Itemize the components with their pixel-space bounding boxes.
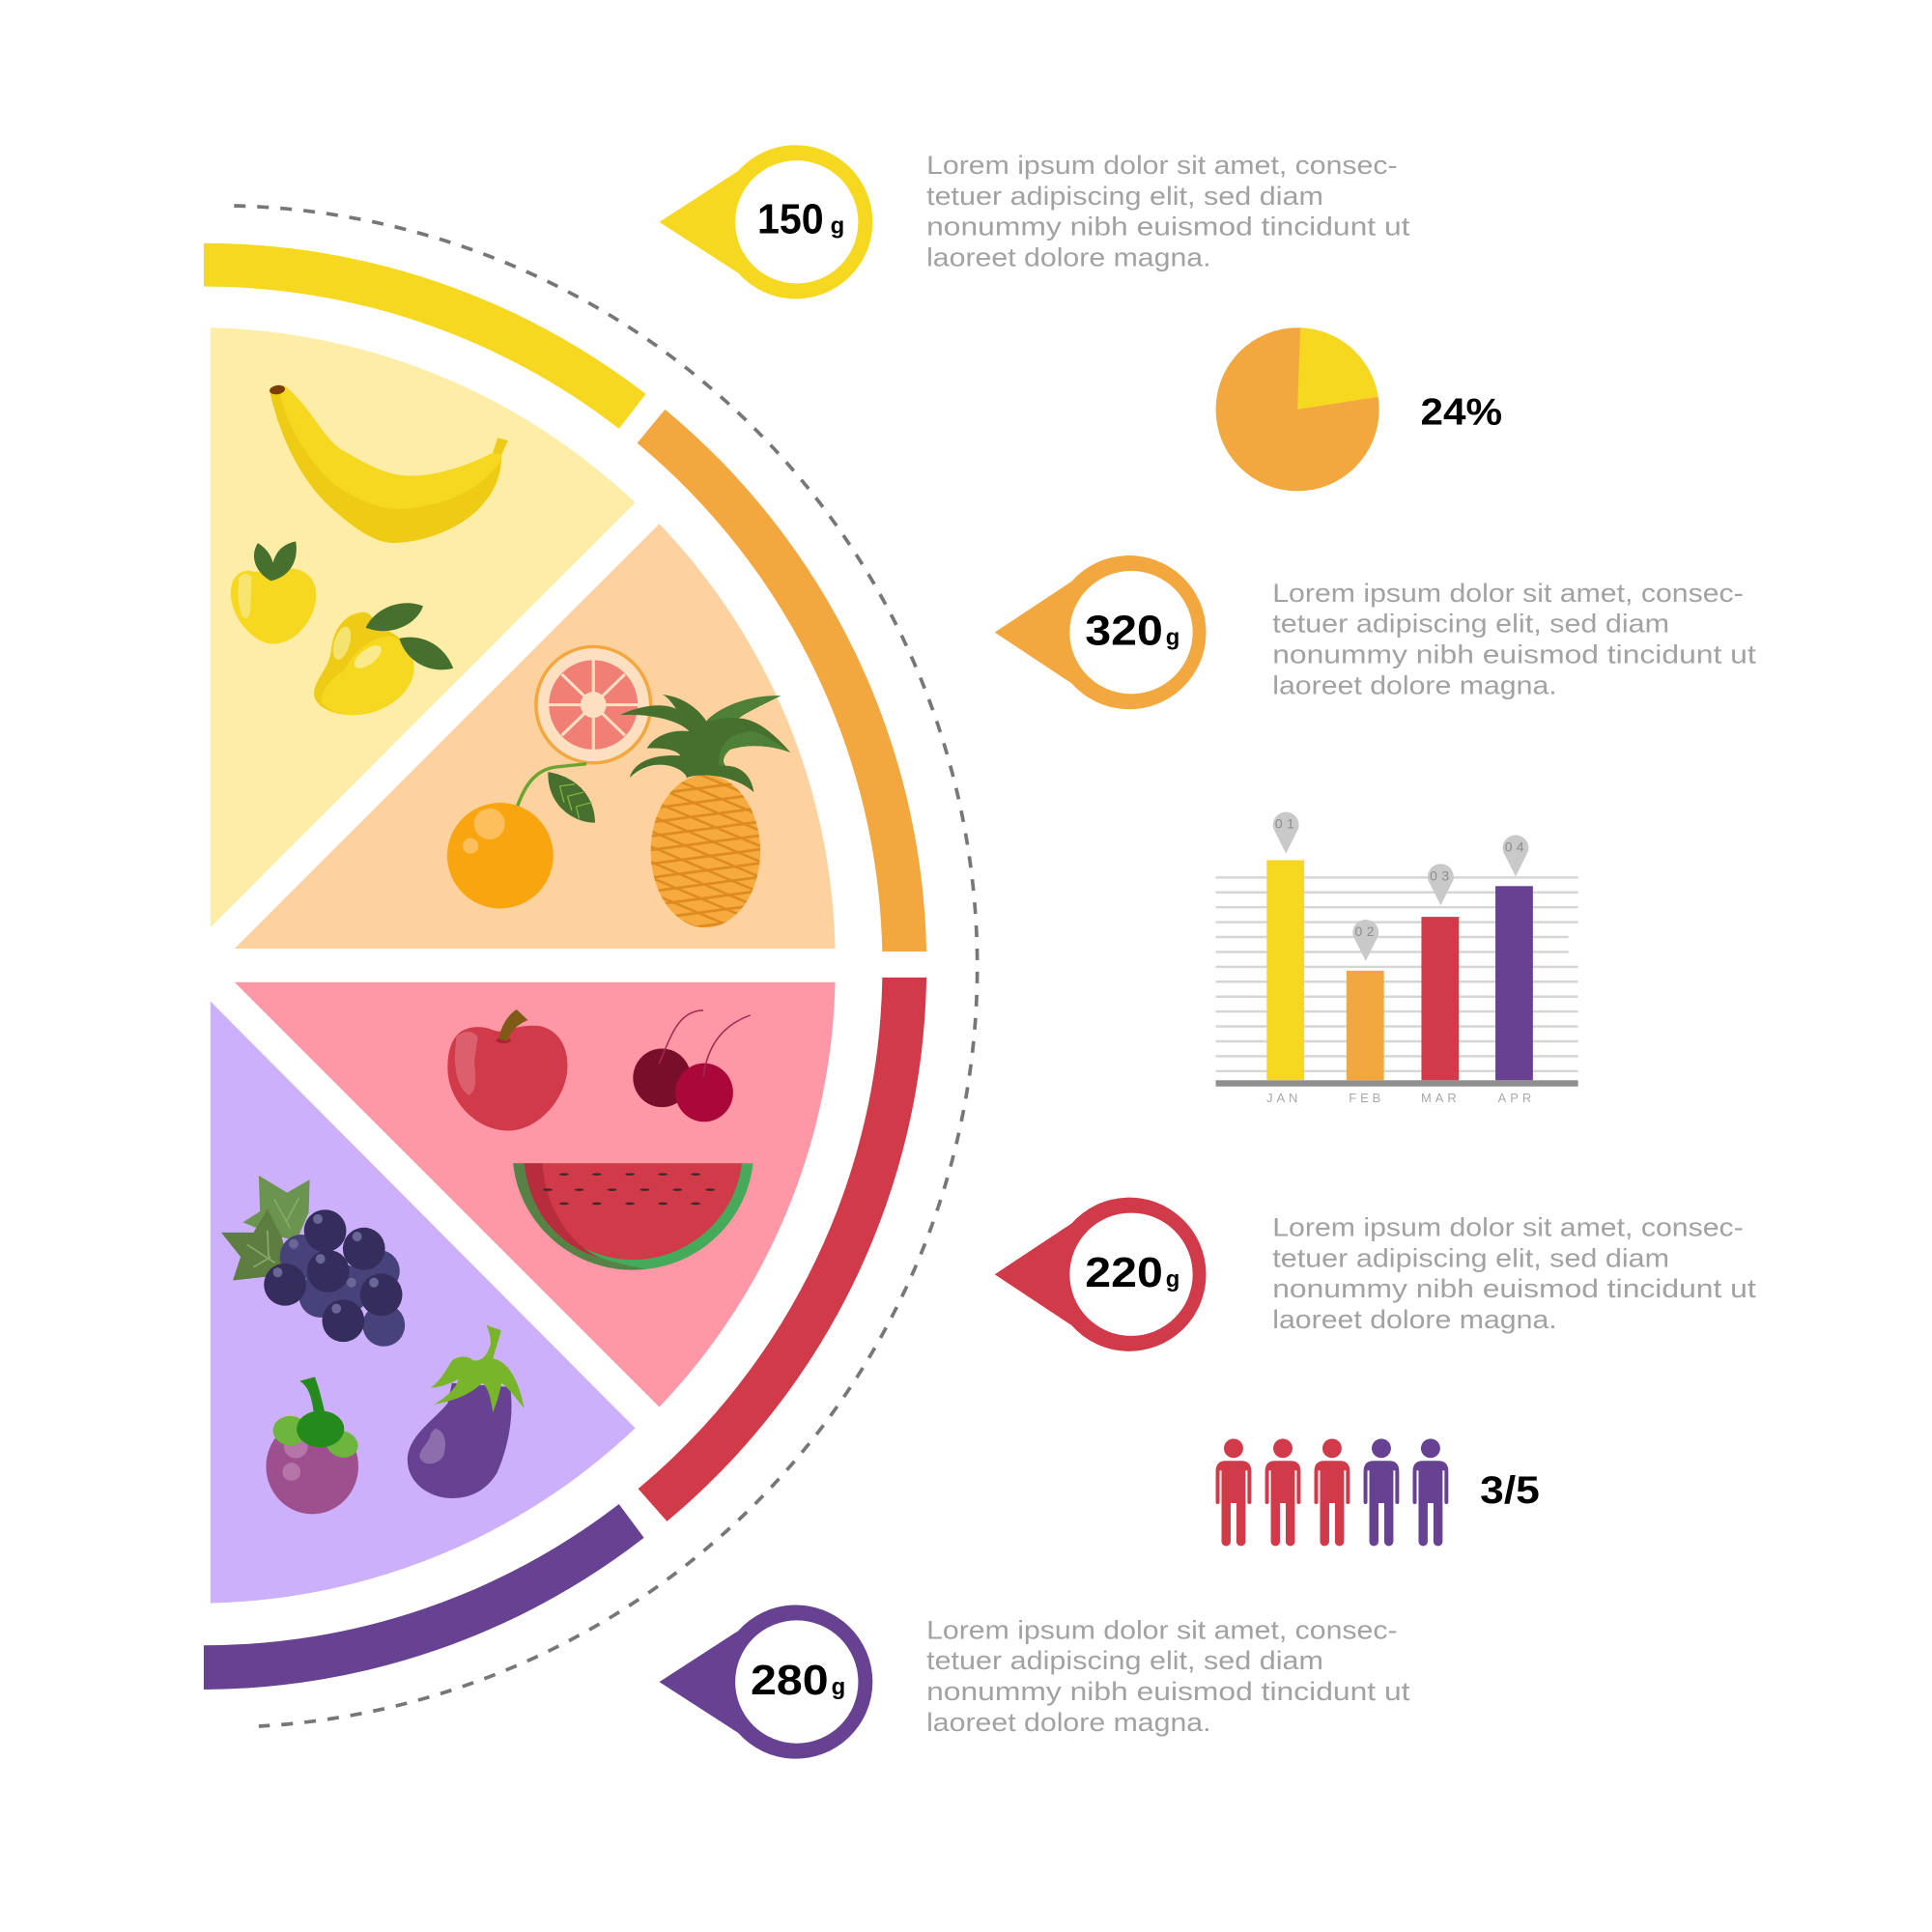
callout: 280g: 280 — [751, 1657, 829, 1704]
callout: 220g — [995, 1198, 1207, 1351]
person 1 — [1216, 1438, 1251, 1547]
outer ring: red — [639, 978, 926, 1521]
outer ring: orange — [638, 410, 926, 952]
icon: orange — [447, 764, 595, 908]
text block 1: tetuer adipiscing elit, sed diam — [926, 182, 1323, 211]
text block 4: laoreet dolore magna. — [926, 1708, 1211, 1737]
bar chart — [1216, 812, 1578, 1105]
callout: 150g: g — [831, 213, 844, 240]
bar: Apr — [1495, 886, 1533, 1080]
right column — [660, 145, 1756, 1759]
pin 02 — [1352, 920, 1378, 961]
text block 4 — [926, 1615, 1410, 1737]
pin 04: 04 — [1505, 838, 1528, 854]
text block 3: tetuer adipiscing elit, sed diam — [1272, 1243, 1669, 1272]
pin 02: 02 — [1355, 923, 1378, 939]
icon: cherries — [633, 1010, 751, 1122]
pin 01 — [1273, 812, 1299, 853]
month labels: MAR — [1421, 1091, 1461, 1105]
text block 4: Lorem ipsum dolor sit amet, consec- — [926, 1615, 1398, 1644]
wheel base — [204, 243, 926, 1690]
person 4 — [1364, 1438, 1399, 1547]
fruits: lower sectors — [221, 1009, 753, 1514]
axis — [1216, 1080, 1578, 1087]
icon: eggplant — [408, 1325, 525, 1498]
month labels: FEB — [1349, 1091, 1384, 1105]
text block 3 — [1272, 1212, 1756, 1334]
text block 1: nonummy nibh euismod tincidunt ut — [926, 213, 1410, 242]
pin 01: 01 — [1275, 816, 1298, 832]
callout: 150g: 150 — [757, 196, 824, 243]
text block 1 — [926, 151, 1410, 272]
text block 2: Lorem ipsum dolor sit amet, consec- — [1272, 579, 1744, 608]
icon: mango — [314, 603, 453, 715]
person 2 — [1265, 1438, 1300, 1547]
panel: yellow sector — [211, 327, 636, 927]
people pictogram — [1216, 1438, 1448, 1547]
callout: 280g — [660, 1605, 872, 1759]
callout: 320g: g — [1166, 625, 1179, 651]
month labels — [1266, 1091, 1535, 1105]
month labels: JAN — [1266, 1091, 1301, 1105]
stat: 24%: 24% — [1420, 392, 1502, 434]
icon: yellow apple — [231, 541, 316, 644]
panel: purple sector — [211, 1002, 636, 1603]
callout: 220g: g — [1166, 1266, 1179, 1293]
text block 3: laoreet dolore magna. — [1272, 1305, 1557, 1334]
callout: 220g: 220 — [1085, 1249, 1163, 1296]
text block 1: laoreet dolore magna. — [926, 243, 1211, 272]
stat: 3/5: 3/5 — [1480, 1469, 1540, 1512]
panel: pink sector — [235, 982, 836, 1407]
text block 4: tetuer adipiscing elit, sed diam — [926, 1646, 1323, 1675]
panel: orange sector — [235, 524, 836, 949]
icon: mangosteen — [266, 1377, 362, 1514]
icon: pineapple — [620, 695, 790, 927]
text block 2: nonummy nibh euismod tincidunt ut — [1272, 639, 1756, 668]
month labels: APR — [1498, 1091, 1535, 1105]
callout: 150g — [660, 145, 872, 298]
bar: Mar — [1421, 917, 1459, 1080]
icon: grapefruit slice — [536, 646, 651, 763]
icon: watermelon — [513, 1163, 753, 1270]
callout: 280g: g — [832, 1674, 845, 1700]
text block 1: Lorem ipsum dolor sit amet, consec- — [926, 151, 1398, 180]
text block 2: tetuer adipiscing elit, sed diam — [1272, 610, 1669, 639]
fruits: upper sectors — [231, 384, 790, 927]
outer ring: yellow — [204, 243, 646, 429]
bar: Feb — [1347, 971, 1384, 1080]
callout: 320g — [995, 555, 1207, 709]
pie chart — [1216, 327, 1379, 491]
pin 03: 03 — [1430, 867, 1454, 883]
icon: grapes — [221, 1176, 405, 1347]
text block 3: nonummy nibh euismod tincidunt ut — [1272, 1274, 1756, 1303]
text block 4: nonummy nibh euismod tincidunt ut — [926, 1677, 1410, 1706]
icon: red apple — [447, 1009, 567, 1131]
bar: Jan — [1266, 860, 1304, 1080]
pin 04 — [1503, 835, 1528, 876]
outer ring: purple — [204, 1504, 644, 1690]
person 5 — [1413, 1438, 1448, 1547]
text block 2: laoreet dolore magna. — [1272, 670, 1557, 699]
person 3 — [1315, 1438, 1350, 1547]
text block 2 — [1272, 579, 1756, 699]
text block 3: Lorem ipsum dolor sit amet, consec- — [1272, 1212, 1744, 1241]
dashed arc — [234, 206, 978, 1726]
pin 03 — [1428, 864, 1454, 905]
icon: banana — [269, 384, 508, 543]
callout: 320g: 320 — [1085, 608, 1163, 655]
